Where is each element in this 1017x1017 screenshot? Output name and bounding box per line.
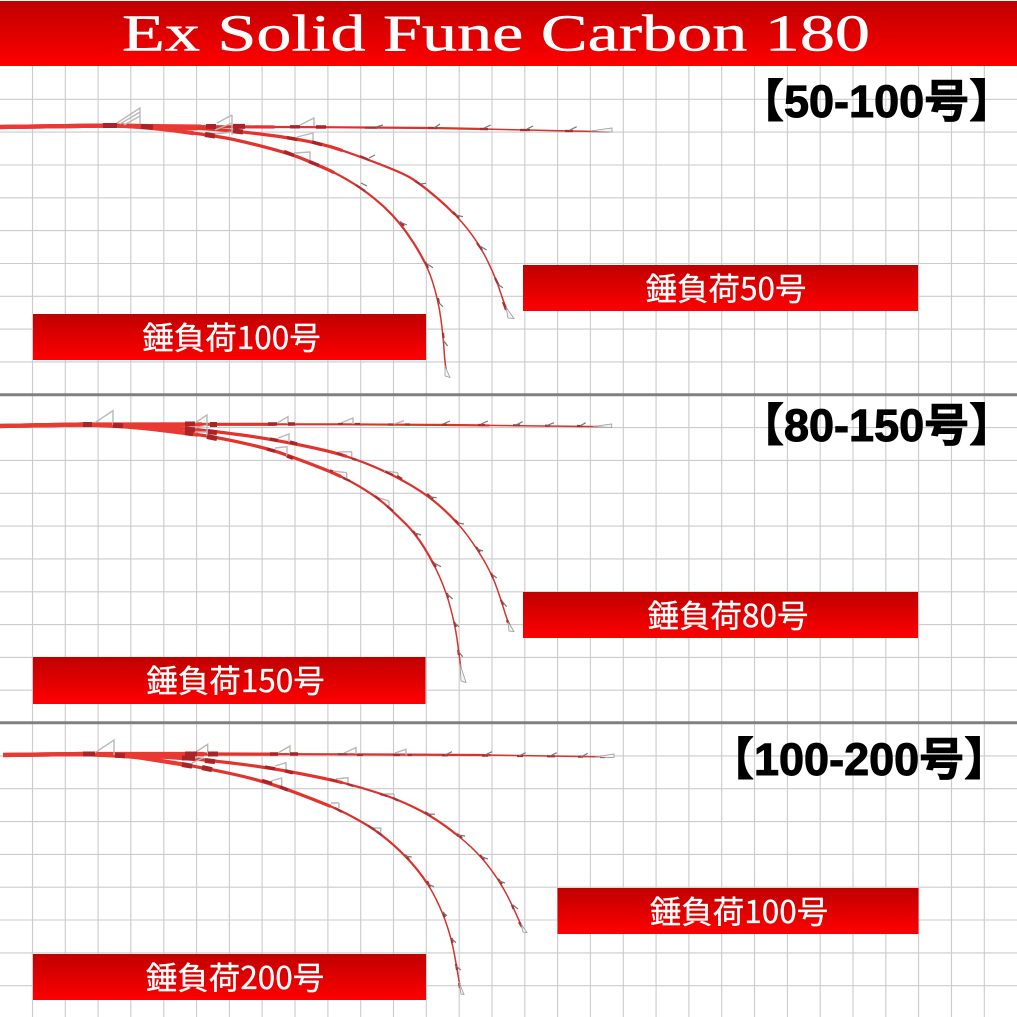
rod guides and wraps <box>83 740 614 994</box>
rod: load 150 <box>0 424 464 682</box>
label: load 100 <box>558 887 918 934</box>
label: load 150 <box>33 656 426 704</box>
label: load 80 <box>523 591 918 638</box>
label: load 80: 錘負荷80号 <box>648 591 808 637</box>
label: load 100 <box>33 313 426 360</box>
label: load 50 <box>523 264 918 311</box>
heading: 100-200: 【100-200号】 <box>709 734 1009 785</box>
rod: no load <box>0 424 612 427</box>
rod: load 100 <box>0 126 448 377</box>
panel: 50-100 <box>0 76 1014 378</box>
label: load 50: 錘負荷50号 <box>646 264 806 310</box>
panel: 100-200 <box>3 734 1009 1000</box>
heading: 50-100: 【50-100号】 <box>739 76 1014 127</box>
rod: load 200 <box>3 754 462 994</box>
label: load 200: 錘負荷200号 <box>146 953 324 999</box>
panel: 80-150 <box>0 400 1014 704</box>
label: load 100: 錘負荷100号 <box>142 313 321 359</box>
rod: load 80 <box>0 424 513 631</box>
label: load 200 <box>33 953 426 1000</box>
rod: no load <box>0 126 610 132</box>
label: load 100: 錘負荷100号 <box>650 887 828 933</box>
title banner <box>0 1 1017 66</box>
rod guides and wraps <box>83 411 612 682</box>
rod: no load <box>3 754 613 757</box>
heading: 80-150: 【80-150号】 <box>739 400 1014 451</box>
rod: load 50 <box>0 126 511 318</box>
title banner: Ex Solid Fune Carbon 180 <box>122 6 870 62</box>
rod: load 100 <box>3 754 525 932</box>
rod guides and wraps <box>103 108 612 378</box>
label: load 150: 錘負荷150号 <box>146 656 325 702</box>
